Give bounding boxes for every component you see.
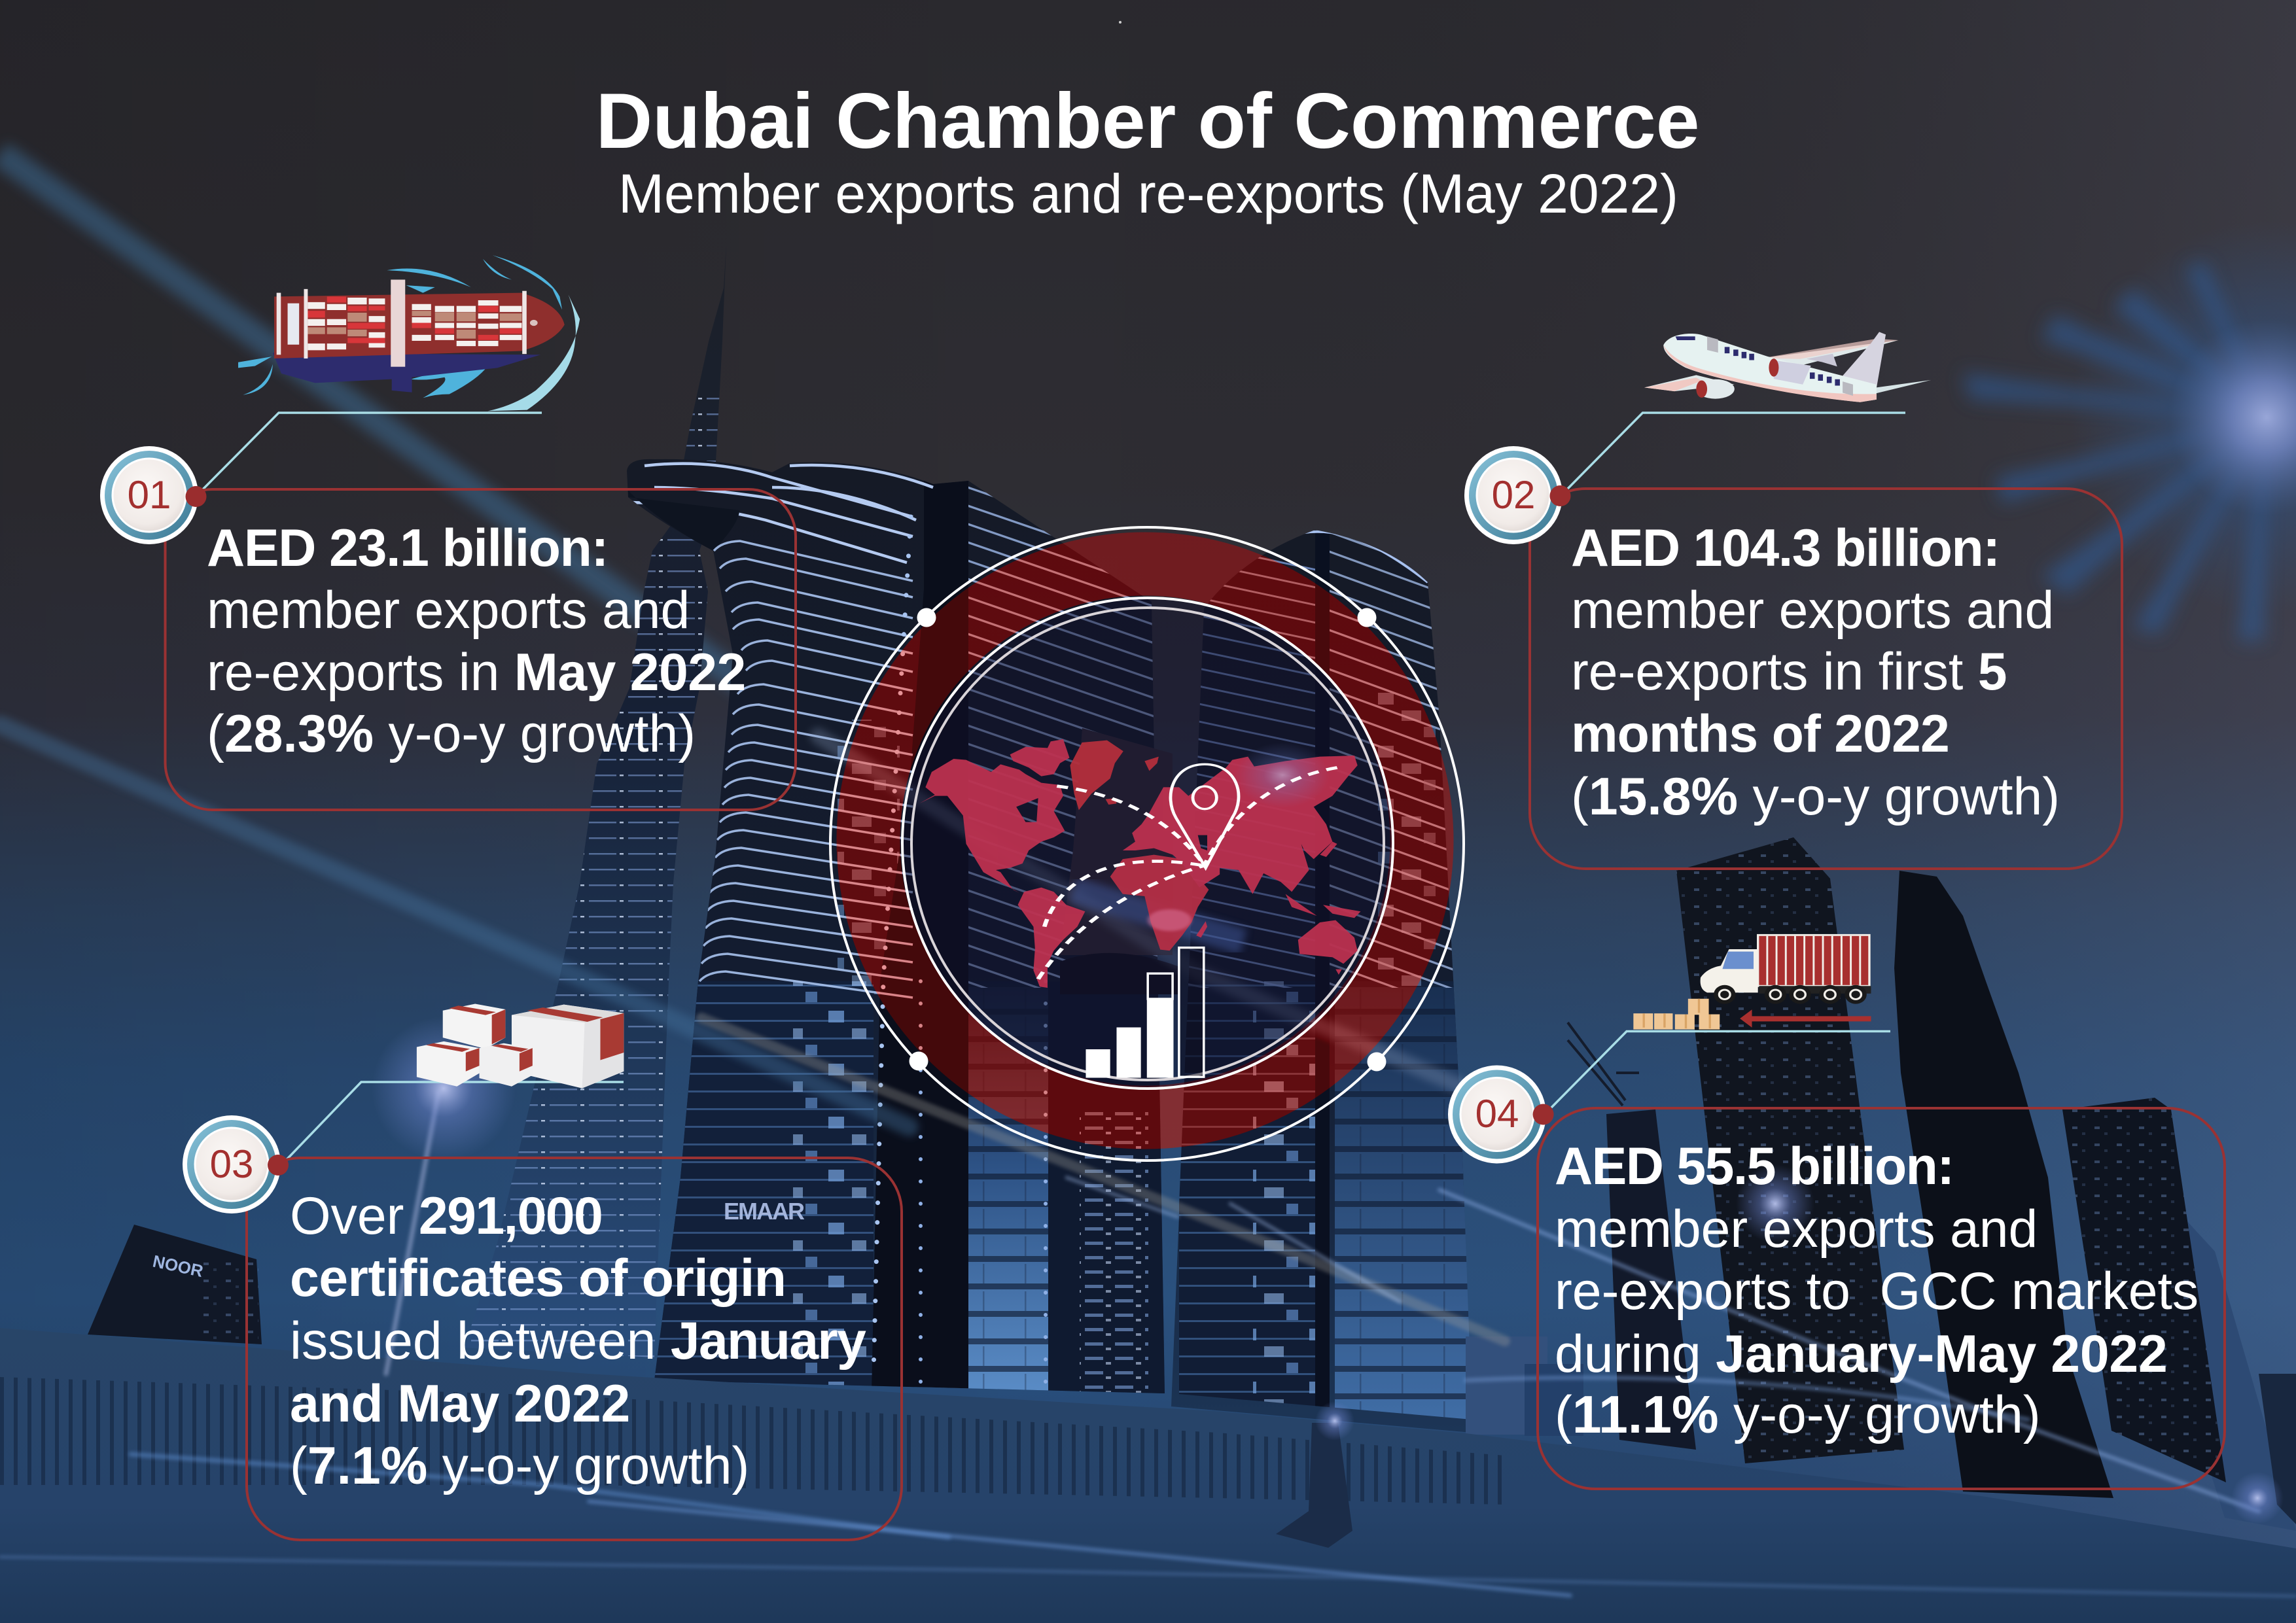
- text block 02: member exports and: [1571, 581, 2054, 640]
- inner dark disc: [902, 598, 1393, 1089]
- light streaks: [0, 725, 2296, 1596]
- text block 03: issued between January: [290, 1312, 866, 1370]
- text block 02: months of 2022: [1571, 705, 1949, 763]
- text block 01: re-exports in May 2022: [207, 643, 746, 702]
- text block 04: [1555, 1137, 2199, 1444]
- panel: callout 04 frame: [1538, 1108, 2225, 1489]
- icon: container ship: [238, 255, 580, 411]
- panel: callout 03 frame: [247, 1158, 902, 1540]
- connector line 04: [1551, 1031, 1890, 1108]
- badge 01: 01: [128, 473, 171, 517]
- callout 02: [1464, 332, 2122, 869]
- central globe graphic: [830, 527, 1464, 1161]
- Burj tower: [471, 254, 726, 1357]
- wall and road: [0, 1328, 2296, 1623]
- badge 04: [1448, 1065, 1554, 1163]
- background light streak behind towers: [0, 154, 818, 736]
- text block 04: during January-May 2022: [1555, 1325, 2168, 1384]
- bar chart icon: [1086, 948, 1204, 1078]
- text block 02: AED 104.3 billion:: [1571, 519, 2000, 578]
- text block 04: (11.1% y-o-y growth): [1555, 1386, 2041, 1444]
- callout 01: [100, 255, 796, 810]
- text block 03: (7.1% y-o-y growth): [290, 1437, 749, 1495]
- text block 04: member exports and: [1555, 1200, 2038, 1259]
- text block 01: [207, 519, 746, 763]
- badge 03: 03: [210, 1142, 253, 1186]
- light sparkles: [372, 1017, 2284, 1524]
- badge 02: 02: [1492, 473, 1535, 517]
- right curved tower: [1171, 523, 1484, 1439]
- callout 03: [183, 1003, 902, 1540]
- text block 03: and May 2022: [290, 1374, 630, 1433]
- red ring: [868, 564, 1422, 1117]
- text block 04: re-exports to GCC markets: [1555, 1262, 2199, 1321]
- text block 03: certificates of origin: [290, 1249, 786, 1308]
- icon: stacked boxes: [417, 1003, 624, 1089]
- icon: truck with boxes and arrow: [1633, 935, 1871, 1030]
- EMAAR building sign: EMAAR: [724, 1198, 805, 1225]
- callout 04: [1448, 935, 2225, 1489]
- connector nodes: [910, 608, 1386, 1072]
- text block 03: [290, 1187, 866, 1495]
- lower facades: [654, 720, 1179, 1400]
- subtitle: Member exports and re-exports (May 2022): [618, 163, 1678, 224]
- title: Dubai Chamber of Commerce: [595, 77, 1700, 165]
- connector line 01: [202, 413, 542, 490]
- connector line 03: [287, 1082, 624, 1160]
- text block 03: Over 291,000: [290, 1187, 602, 1246]
- dashed trade routes: [1038, 767, 1337, 979]
- icon: airplane: [1644, 332, 1931, 402]
- text block 01: AED 23.1 billion:: [207, 519, 608, 578]
- text block 01: member exports and: [207, 581, 690, 640]
- text block 04: AED 55.5 billion:: [1555, 1137, 1954, 1196]
- connector line 02: [1568, 413, 1905, 489]
- central low tower and sky gap: [1060, 728, 1180, 994]
- panel: callout 02 frame: [1530, 489, 2122, 869]
- left curved tower: [627, 459, 1179, 1400]
- small low-rise building left: [88, 1225, 262, 1344]
- world map: [919, 739, 1360, 988]
- badge 03: [183, 1115, 289, 1213]
- location pin: [1171, 764, 1239, 868]
- badge 04: 04: [1475, 1092, 1519, 1136]
- small low-rise building left: NOOR: [151, 1251, 205, 1281]
- text block 02: (15.8% y-o-y growth): [1571, 767, 2060, 826]
- sun flare top right: [1963, 221, 2296, 641]
- badge 01: [100, 446, 207, 544]
- right skyline towers: [1466, 837, 2296, 1531]
- text block 02: [1571, 519, 2060, 826]
- badge 02: [1464, 446, 1570, 544]
- text block 02: re-exports in first 5: [1571, 642, 2007, 701]
- outer circle outline: [830, 527, 1464, 1161]
- inner circle outlines: [902, 598, 1393, 1089]
- text block 01: (28.3% y-o-y growth): [207, 705, 696, 763]
- panel: callout 01 frame: [165, 489, 796, 810]
